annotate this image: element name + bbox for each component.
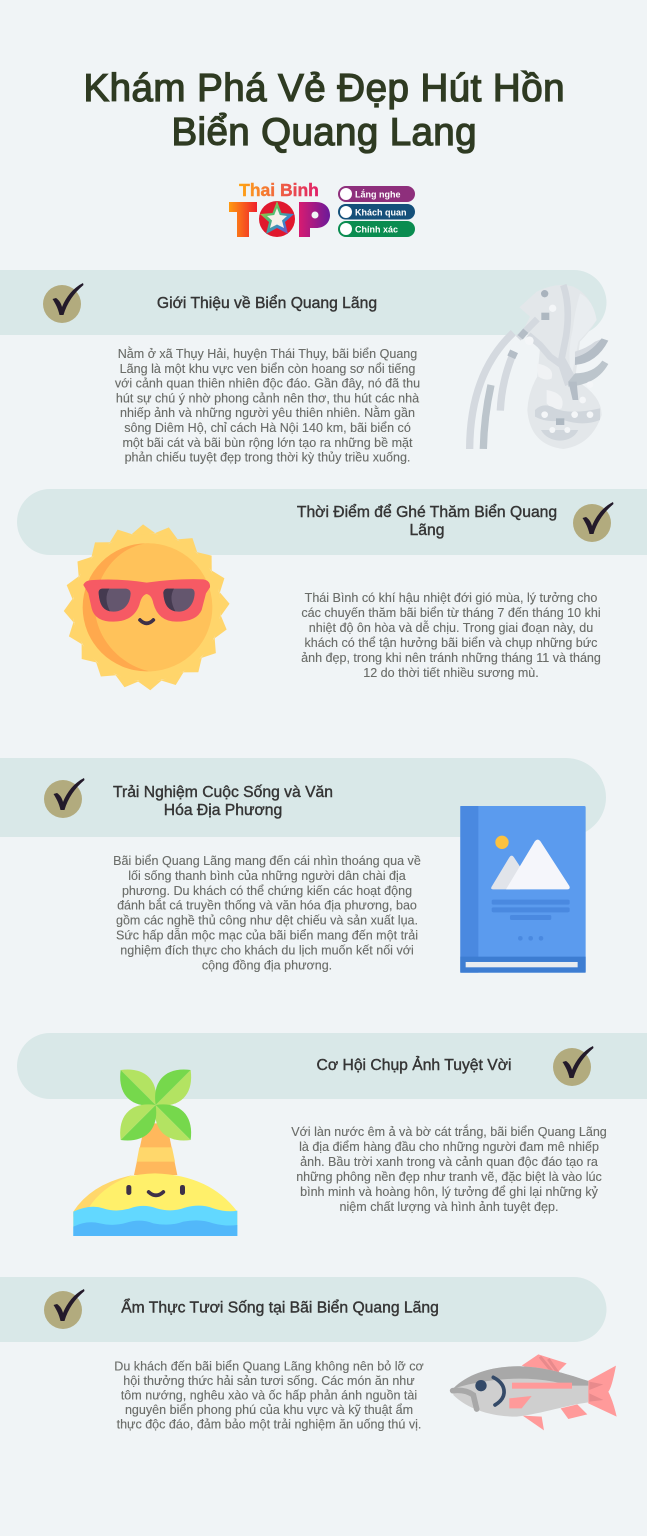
text block 3: lối sống thanh bình của những người dân chài địa [128,869,406,883]
heading band 4 [17,1033,647,1099]
icon: check 2 [573,502,614,542]
text block 2: 12 do thời tiết nhiều sương mù. [363,666,539,680]
text block 5: nguyên biển phong phú của khu vực và kỹ thuật ẩm [125,1403,413,1417]
text block 4: bình minh và hoàng hôn, lý tưởng để ghi lại những kỷ [300,1185,599,1199]
heading 1: Giới Thiệu về Biển Quang Lãng [157,294,377,312]
text block 1: sông Diêm Hộ, chỉ cách Hà Nội 140 km, bãi biển có [124,421,411,435]
title [84,67,564,154]
text block 1: phản chiếu tuyệt đẹp trong thời kỳ thủy triều xuống. [125,451,410,465]
text block 2: khách có thể tận hưởng bãi biển và chụp những bức [305,636,597,650]
heading band 2 [17,489,647,555]
text block 5: thực độc đáo, đảm bảo một trải nghiệm ăn uống thú vị. [117,1418,421,1432]
heading 3: Trải Nghiệm Cuộc Sống và Văn [113,784,333,801]
panel: thời điểm [17,489,647,694]
heading 4: Cơ Hội Chụp Ảnh Tuyệt Vời [317,1055,511,1074]
icon: blue book [460,806,586,973]
logo pills: Lắng nghe [355,188,400,200]
icon: check 3 [44,778,84,818]
text block 3: nghiệm đích thực cho khách du lịch muốn kết nối với [120,943,414,957]
logo pills: Khách quan [355,208,407,218]
icon: check 5 [44,1289,84,1329]
text block 3: phương. Du khách có thể chứng kiến các hoạt động [122,884,412,898]
logo: Thai Binh TOP: Thai Binh [239,180,319,200]
panel: trải nghiệm [0,758,606,973]
heading band 5 [0,1277,606,1342]
text block 1: hút sự chú ý nhờ phong cảnh nên thơ, thu hút các nhà [116,391,419,405]
panel: giới thiệu [0,270,608,465]
panel: ẩm thực [0,1277,617,1432]
title: Biển Quang Lang [172,111,476,154]
text block 3 [113,854,421,972]
text block 2: nhiệt độ ôn hòa và dễ chịu. Trong giai đoạn này, du [309,620,593,635]
heading 2: Lãng [410,522,444,539]
heading 2 [297,503,557,539]
heading band 3 [0,758,606,837]
heading 5: Ẩm Thực Tươi Sống tại Bãi Biển Quang Lãng [121,1298,439,1316]
title: Khám Phá Vẻ Đẹp Hút Hồn [84,67,564,110]
text block 4: niệm chất lượng và hình ảnh tuyệt đẹp. [340,1200,558,1214]
text block 3: đánh bắt cá truyền thống và văn hóa địa phương, bao [117,898,417,913]
text block 1: Nằm ở xã Thụy Hải, huyện Thái Thụy, bãi biển Quang [118,346,417,361]
text block 1: một bãi cát và bãi bùn rộng lớn tạo ra những bề mặt [122,436,413,450]
icon: check 4 [553,1046,594,1086]
text block 1 [115,346,420,465]
text block 1: Lãng là một khu vực ven biển còn hoang sơ nổi tiếng [120,362,415,376]
text block 5: tôm nướng, nghêu xào và ốc hấp phản ánh nguồn tài [121,1388,417,1402]
text block 4: là địa điểm hàng đầu cho những người đam mê nhiếp [299,1140,599,1154]
text block 4: ảnh. Bầu trời xanh trong và cảnh quan độc đáo tạo ra [300,1155,598,1169]
logo: Thai Binh TOP [229,180,415,237]
heading 2: Thời Điểm để Ghé Thăm Biển Quang [297,503,557,521]
text block 3: Bãi biển Quang Lãng mang đến cái nhìn thoáng qua về [113,854,421,868]
text block 2: Thái Bình có khí hậu nhiệt đới gió mùa, lý tưởng cho [305,591,597,605]
text block 4 [291,1124,607,1214]
heading band 1 [0,270,606,335]
text block 1: với cảnh quan thiên nhiên độc đáo. Gần đây, nó đã thu [115,377,420,391]
icon: palm island [73,1070,237,1236]
logo pills: Chính xác [355,224,398,234]
text block 5 [114,1360,424,1432]
text block 4: những phông nền đẹp như tranh vẽ, đặc biệt là vào lúc [296,1170,602,1184]
text block 5: Du khách đến bãi biển Quang Lãng không nên bỏ lỡ cơ [114,1360,424,1374]
text block 1: nhiếp ảnh và những người yêu thiên nhiên. Nằm gần [120,405,415,420]
icon: fish [453,1354,617,1430]
text block 2 [301,591,601,680]
heading 3: Hóa Địa Phương [164,802,282,819]
text block 2: các chuyến thăm bãi biển từ tháng 7 đến tháng 10 khi [301,606,601,620]
text block 3: gồm các nghề thủ công như dệt chiếu và sản xuất lụa. [116,914,418,928]
icon: check 1 [43,283,84,323]
logo pills [338,186,415,237]
text block 3: cộng đồng địa phương. [202,958,332,972]
text block 2: ảnh đẹp, trong khi nên tránh những tháng 11 và tháng [301,651,601,665]
icon: merlion [470,285,608,449]
text block 4: Với làn nước êm ả và bờ cát trắng, bãi biển Quang Lãng [291,1124,607,1139]
panel: chụp ảnh [17,1033,647,1236]
heading 3 [113,784,333,819]
icon: sun with sunglasses [60,521,233,694]
text block 3: Sức hấp dẫn mộc mạc của bãi biển mang đến một trải [116,928,418,942]
text block 5: hội thưởng thức hải sản tươi sống. Các món ăn như [123,1374,415,1388]
